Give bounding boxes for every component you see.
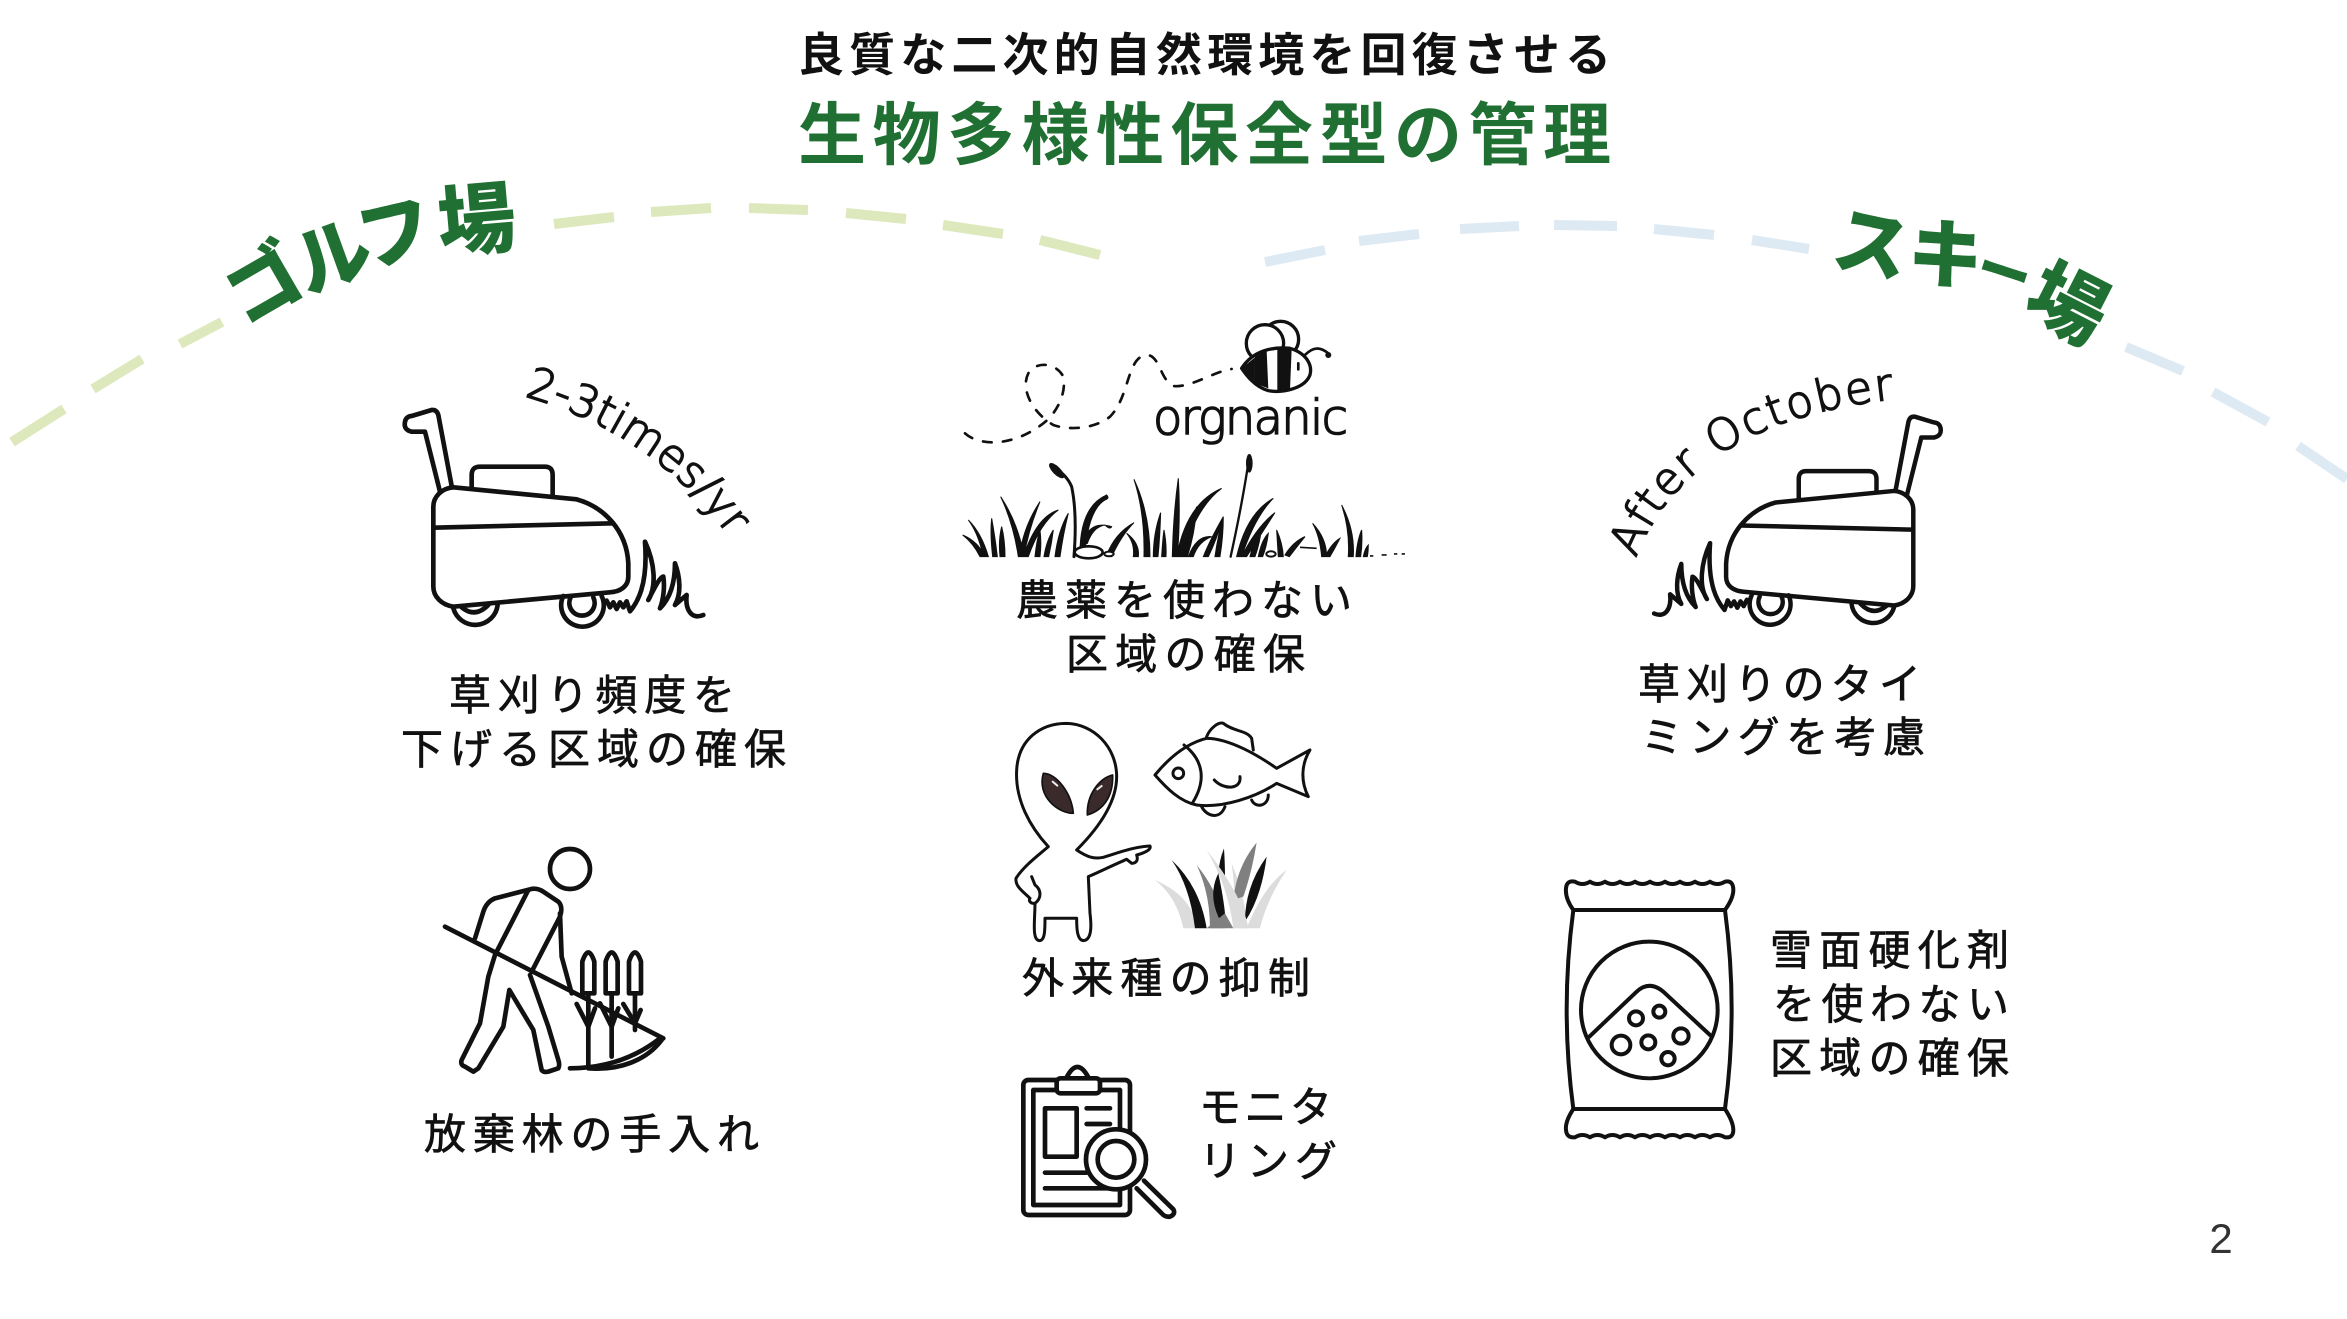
invasive grass tuft (1155, 843, 1287, 928)
handwritten word: organic: orgnanic (1153, 390, 1348, 446)
text: 草刈り頻度を下げる区域の確保: 草刈り頻度を (449, 672, 735, 719)
icon: person with scythe (445, 849, 663, 1072)
page number: 2 (2209, 1215, 2233, 1262)
heading: ski resort: ー (1969, 237, 2039, 311)
handwritten note: After October: After October (1611, 374, 1892, 558)
heading: golf course: フ (349, 184, 441, 283)
heading: ski resort: 場 (2013, 248, 2122, 362)
icon: lawn mower left with 2-3 times/yr (402, 367, 750, 629)
dashed arc: golf course (12, 208, 1100, 442)
text: 農薬を使わない区域の確保 (1016, 577, 1352, 678)
mower left (405, 410, 703, 627)
title (798, 29, 1611, 174)
text: 外来種の抑制: 外来種の抑制 (1022, 955, 1310, 1002)
dashed arc: ski resort (1265, 225, 2347, 479)
text: 雪面硬化剤を使わない区域の確保: を使わない (1773, 981, 2009, 1028)
heading: golf course: ゴ (211, 229, 317, 340)
fish (1155, 723, 1310, 815)
text: 放棄林の手入れ: 放棄林の手入れ (424, 1111, 759, 1158)
text: 草刈りのタイミングを考慮: ミングを考慮 (1641, 714, 1925, 761)
text: 雪面硬化剤を使わない区域の確保: 区域の確保 (1770, 1035, 2009, 1082)
handwritten note: 2-3 times per year: 2-3times/yr (526, 367, 750, 529)
heading: golf course: ル (283, 204, 383, 309)
icon: clipboard with magnifier (1023, 1067, 1174, 1217)
grass (963, 454, 1405, 558)
bee and flight path (965, 321, 1331, 442)
text: 農薬を使わない区域の確保: 農薬を使わない (1016, 577, 1352, 624)
icon: alien, fish, invasive grass (1016, 723, 1310, 941)
text: モニタリング: リング (1199, 1138, 1337, 1185)
heading: ski resort (1826, 197, 2122, 362)
alien (1016, 723, 1150, 941)
text: モニタリング (1199, 1084, 1337, 1185)
heading: golf course (211, 174, 519, 340)
text: 雪面硬化剤を使わない区域の確保 (1770, 927, 2009, 1082)
heading: ski resort: キ (1900, 206, 1992, 305)
text: 農薬を使わない区域の確保: 区域の確保 (1066, 631, 1305, 678)
text: 草刈り頻度を下げる区域の確保 (401, 672, 786, 773)
heading: ski resort: ス (1826, 197, 1917, 294)
text: モニタリング: モニタ (1199, 1084, 1332, 1131)
icon: bee, flight path, grass, organic (963, 321, 1405, 558)
title line 2: 生物多様性保全型の管理 (798, 98, 1611, 174)
text: 草刈りのタイミングを考慮: 草刈りのタイ (1638, 661, 1921, 708)
mower right (1654, 417, 1941, 625)
text: 草刈りのタイミングを考慮 (1638, 661, 1925, 761)
text: 草刈り頻度を下げる区域の確保: 下げる区域の確保 (401, 726, 786, 773)
icon: lawn mower right with After October (1611, 374, 1943, 627)
text: 雪面硬化剤を使わない区域の確保: 雪面硬化剤 (1770, 927, 2009, 974)
title line 1: 良質な二次的自然環境を回復させる (798, 29, 1611, 81)
icon: bag of snow hardener (1566, 881, 1733, 1137)
heading: golf course: 場 (434, 174, 519, 268)
